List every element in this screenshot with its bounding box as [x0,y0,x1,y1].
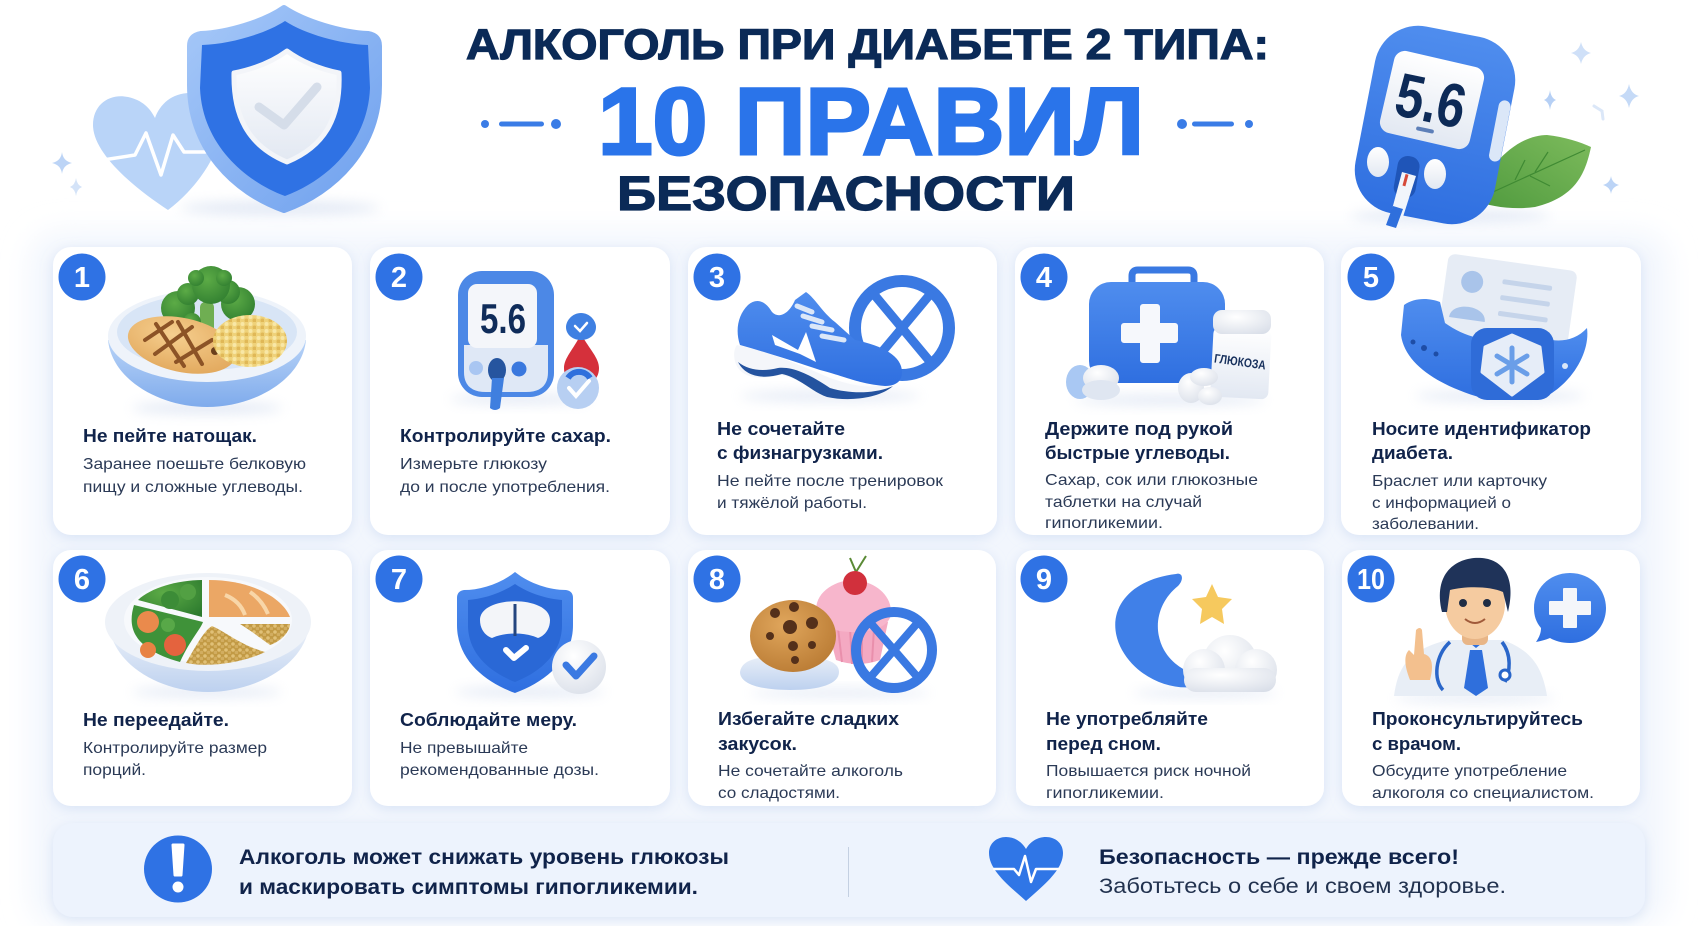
card 6 [53,550,352,806]
text card 4: быстрые углеводы. [1045,443,1230,463]
card 7 [370,550,670,806]
text card 10: алкоголя со специалистом. [1372,785,1594,802]
text card 1 [83,426,306,496]
text card 10 [1372,709,1594,802]
badge 8: 8 [709,564,725,596]
text card 3: Не пейте после тренировок [717,473,944,490]
badge 5: 5 [1363,262,1379,294]
text card 8 [718,709,903,802]
title line 3: БЕЗОПАСНОСТИ [617,168,1075,221]
icon: moon, star and cloud [1115,574,1277,697]
icon: doctor with plus bubble [1394,558,1606,702]
badge 3: 3 [709,262,725,294]
text card 6: Не переедайте. [83,710,229,730]
text card 7: Не превышайте [400,740,528,757]
badge 6 [58,556,106,602]
warning text [239,846,729,899]
text card 4: гипогликемии. [1045,515,1163,532]
header illustration: shield and heart [52,8,380,215]
badge 7: 7 [391,564,407,596]
card 10 [1342,550,1640,806]
card 8 [688,550,996,806]
icon: medical bracelet and ID card [1401,253,1587,401]
text card 4: таблетки на случай [1045,494,1202,511]
text card 5 [1372,419,1591,533]
icon: bowl with food [108,266,306,414]
text card 5: диабета. [1372,443,1453,463]
text card 3: Не сочетайте [717,419,845,439]
text card 3 [717,419,944,512]
badge 1 [58,254,106,300]
badge 9 [1020,556,1068,602]
badge 1: 1 [74,262,90,294]
badge 4 [1020,254,1068,300]
badge 3 [694,254,740,300]
text card 5: Браслет или карточку [1372,473,1547,490]
text card 4 [1045,419,1258,532]
icon: cookie, cupcake and prohibition sign [740,556,932,697]
text card 7 [400,710,599,779]
icon: shield with scale and check [455,572,606,697]
card 2 [370,247,670,535]
badge 10 [1348,556,1394,602]
text card 9 [1046,709,1251,802]
text card 10: с врачом. [1372,734,1461,754]
text card 8: со сладостями. [718,785,840,802]
icon: meter with blood drop: 5.6 [480,295,526,342]
text card 4: Сахар, сок или глюкозные [1045,472,1258,489]
text card 5: заболевании. [1372,516,1479,533]
title line 1: АЛКОГОЛЬ ПРИ ДИАБЕТЕ 2 ТИПА: [466,21,1269,69]
text card 10: Проконсультируйтесь [1372,709,1583,729]
text card 1: Не пейте натощак. [83,426,257,446]
text card 8: Избегайте сладких [718,709,899,729]
text card 9: Повышается риск ночной [1046,763,1251,780]
text card 6: Контролируйте размер [83,740,267,757]
badge 4: 4 [1036,262,1052,294]
badge 6: 6 [74,564,90,596]
text card 3: с физнагрузками. [717,443,883,463]
text card 9: гипогликемии. [1046,785,1164,802]
text card 8: закусок. [718,734,797,754]
header illustration: glucose meter and leaf [1347,18,1639,232]
text card 8: Не сочетайте алкоголь [718,763,903,780]
text card 2: Измерьте глюкозу [400,456,547,473]
icon: sneaker with prohibition sign [734,281,949,401]
text card 1: Заранее поешьте белковую [83,456,306,473]
title ornament left [481,119,561,129]
bottom banner [53,823,1645,917]
badge 2: 2 [391,262,407,294]
text card 2 [400,426,611,496]
badge 9: 9 [1036,564,1052,596]
title ornament right [1177,119,1253,129]
icon: first aid kit, glucose bottle and tablets: ГЛЮКОЗА [1213,351,1267,373]
badge 10: 10 [1357,564,1385,596]
text card 9: перед сном. [1046,734,1161,754]
badge 8 [694,556,740,602]
header illustration: glucose meter and leaf: 5.6 [1389,60,1472,142]
card 1 [53,247,352,535]
text card 5: с информацией о [1372,495,1511,512]
badge 2 [376,254,422,300]
text card 5: Носите идентификатор [1372,419,1591,439]
badge 7 [376,556,422,602]
safety text [1099,846,1506,898]
icon: meter with blood drop [450,271,599,410]
card 3 [688,247,997,535]
text card 3: и тяжёлой работы. [717,495,867,512]
card 4 [1015,247,1324,535]
title [466,21,1269,221]
icon: portioned plate [105,573,311,697]
card 9 [1016,550,1324,806]
title line 2: 10 ПРАВИЛ [598,69,1144,175]
text card 2: до и после употребления. [400,479,610,496]
text card 2: Контролируйте сахар. [400,426,611,446]
text card 6: порций. [83,762,146,779]
text card 7: рекомендованные дозы. [400,762,599,779]
text card 10: Обсудите употребление [1372,763,1567,780]
warning text: Алкоголь может снижать уровень глюкозы [239,846,729,869]
icon: heart with pulse [989,837,1063,901]
icon: exclamation mark [144,836,212,902]
text card 9: Не употребляйте [1046,709,1208,729]
text card 4: Держите под рукой [1045,419,1233,439]
text card 7: Соблюдайте меру. [400,710,577,730]
card 5 [1341,247,1641,535]
safety text: Заботьтесь о себе и своем здоровье. [1099,875,1506,898]
safety text: Безопасность — прежде всего! [1099,846,1459,869]
badge 5 [1348,254,1394,300]
icon: first aid kit, glucose bottle and tablets [1066,270,1272,405]
text card 1: пищу и сложные углеводы. [83,479,303,496]
text card 6 [83,710,267,779]
warning text: и маскировать симптомы гипогликемии. [239,876,698,899]
